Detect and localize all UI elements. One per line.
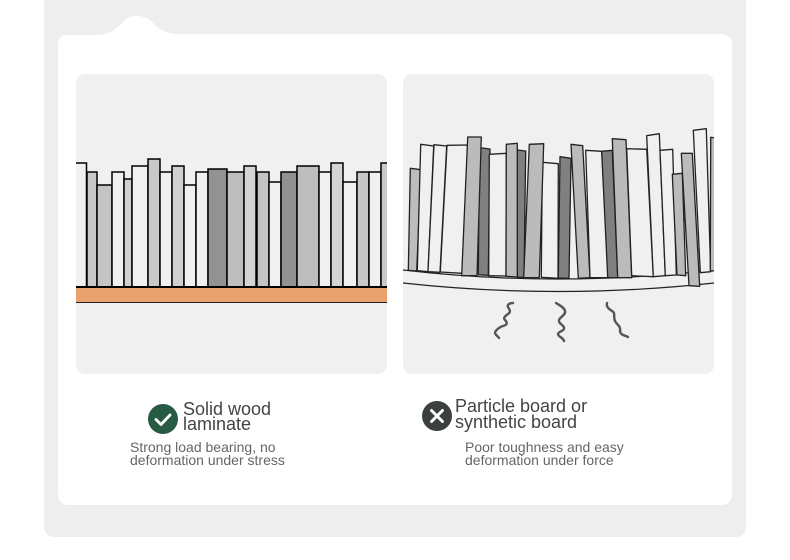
text: solid wood description (130, 439, 285, 468)
stress squiggles (495, 303, 628, 341)
text: particle board description: deformation under force (465, 452, 614, 468)
panel: particle board shelf (403, 74, 716, 374)
heading: particle board: synthetic board (455, 412, 577, 432)
panel: solid wood shelf (70, 74, 393, 374)
bent shelf (403, 270, 714, 292)
leaning books (408, 129, 716, 286)
heading: solid wood (183, 399, 271, 434)
heading: particle board: Particle board or (455, 396, 587, 416)
orange board (76, 287, 387, 302)
heading: solid wood: Solid wood (183, 399, 271, 419)
text: solid wood description: Strong load bearing, no (130, 439, 276, 455)
text: solid wood description: deformation under stress (130, 452, 285, 468)
books on straight shelf (70, 159, 393, 287)
text: particle board description (465, 439, 624, 468)
heading: particle board (455, 396, 587, 432)
white inner card with tab (58, 16, 732, 505)
text: particle board description: Poor toughness and easy (465, 439, 624, 455)
heading: solid wood: laminate (183, 414, 251, 434)
icon: check mark (148, 404, 178, 434)
icon: cross mark (422, 401, 452, 431)
